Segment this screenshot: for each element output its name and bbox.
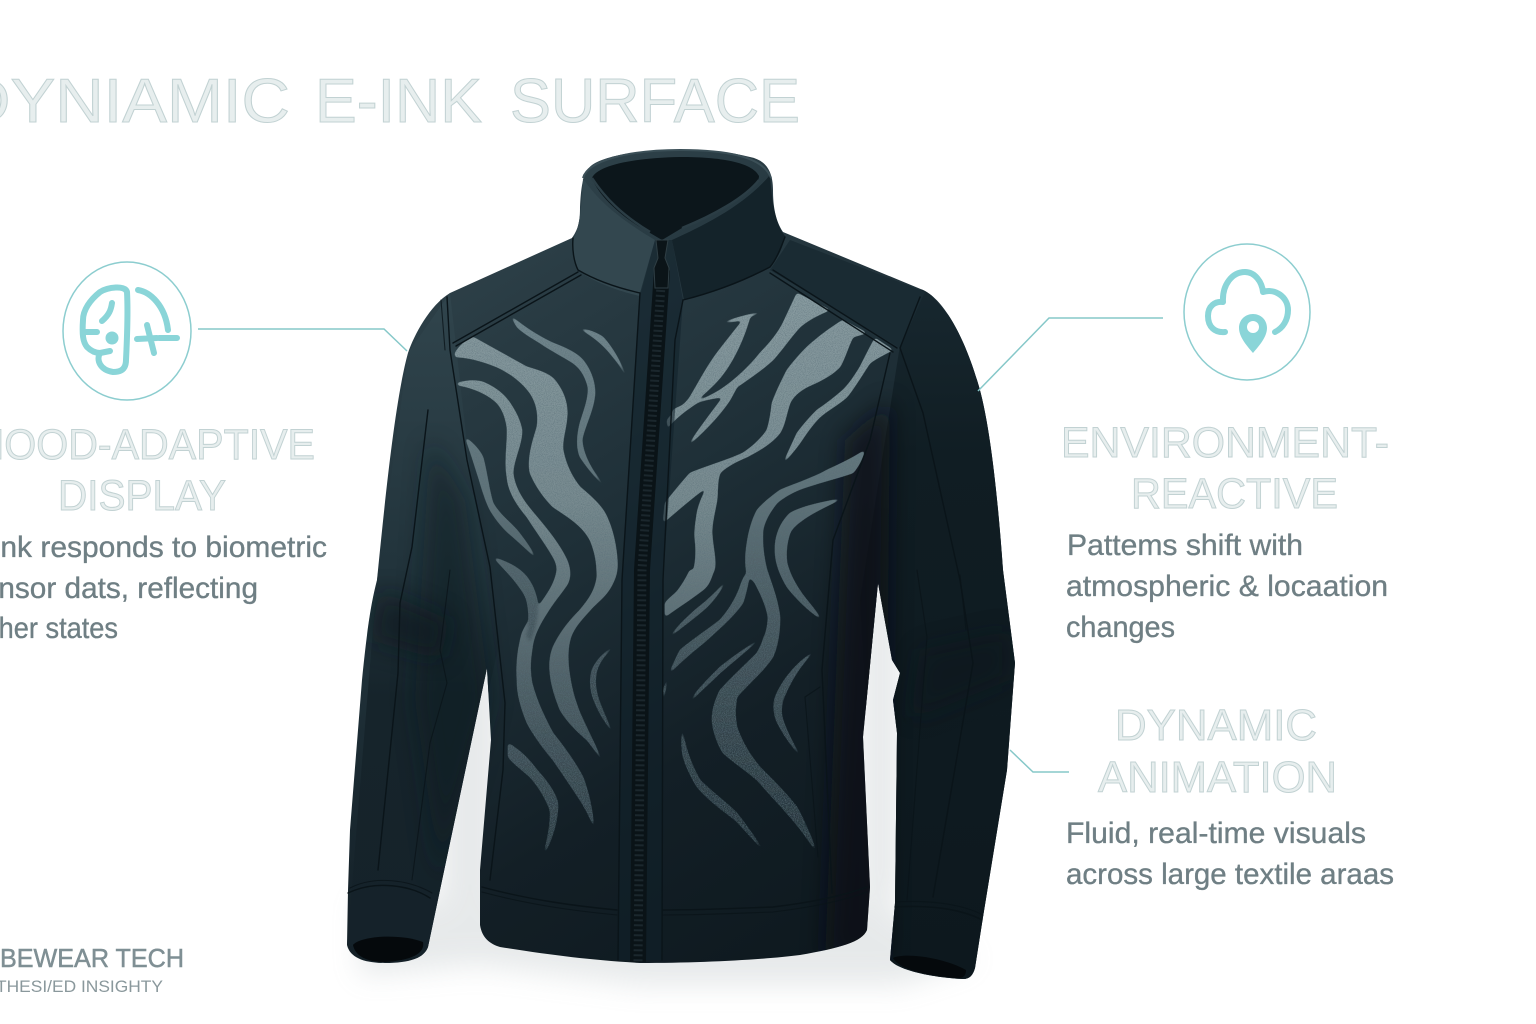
title: E-INK [315, 67, 482, 136]
cuff openings [353, 937, 423, 962]
description: changes [1066, 611, 1175, 644]
shading: sleeves and folds [347, 240, 1020, 980]
footer brand [0, 943, 184, 996]
footer brand: THESI/ED INSIGHTY [0, 977, 163, 996]
heading [0, 421, 315, 520]
connector line [198, 329, 407, 351]
heading: DISPLAY [58, 472, 226, 520]
description: Fluid, real-time visuals [1066, 817, 1366, 850]
ground shadow [360, 590, 975, 985]
jacket silhouette [347, 150, 1015, 979]
description: across large textile araas [1066, 858, 1394, 891]
description [0, 531, 327, 645]
heading: DYNAMIC [1115, 701, 1317, 750]
footer brand: BEWEAR TECH [0, 943, 184, 973]
panel: environment-reactive [978, 244, 1389, 644]
heading [1061, 419, 1389, 518]
left chest swirls [455, 315, 632, 857]
e-ink swirl pattern [455, 293, 893, 857]
heading [1098, 701, 1337, 802]
connector line [978, 318, 1163, 391]
heading: ANIMATION [1098, 753, 1337, 802]
collar [573, 150, 785, 300]
title [0, 67, 800, 136]
zipper pull [654, 240, 669, 288]
heading: ENVIRONMENT- [1061, 419, 1389, 467]
description [1066, 529, 1388, 644]
description [1066, 817, 1394, 891]
title: SURFACE [510, 67, 800, 136]
description: Pattems shift with [1067, 529, 1303, 562]
zipper and placket [618, 240, 683, 962]
icon: brain in circle [63, 262, 191, 400]
heading: REACTIVE [1131, 470, 1338, 518]
description: Ink responds to biometric [0, 531, 327, 564]
icon: cloud and location pin in circle [1184, 244, 1310, 380]
seams and hems [348, 237, 983, 978]
collar inner opening [592, 157, 759, 240]
connector line [1010, 750, 1069, 772]
jacket illustration [347, 150, 1020, 985]
description: atmospheric & locaation [1066, 570, 1388, 603]
right chest swirls [663, 293, 893, 855]
panel: dynamic animation [1010, 701, 1394, 891]
panel: mood-adaptive display [0, 262, 407, 645]
